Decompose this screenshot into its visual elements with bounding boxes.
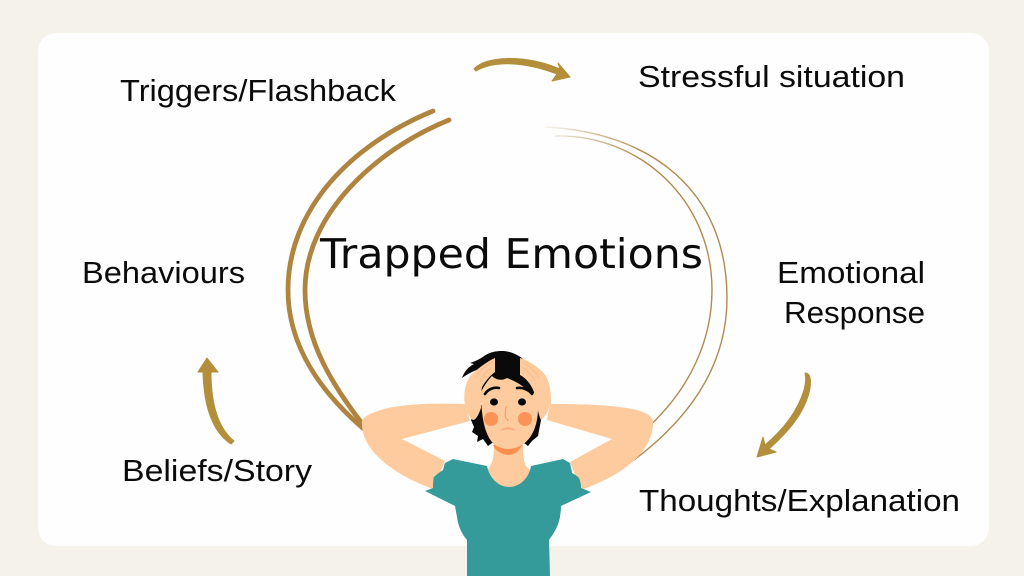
- cheeks: [484, 412, 532, 426]
- label: beliefs: Beliefs/Story: [122, 453, 313, 488]
- label: triggers: Triggers/Flashback: [120, 73, 397, 108]
- thick left arcs: [288, 111, 449, 441]
- left arm: [362, 404, 470, 489]
- left hand: [464, 358, 495, 420]
- thin right arcs: [545, 127, 727, 460]
- neck shadow: [493, 445, 522, 455]
- title: Trapped Emotions: [319, 230, 703, 278]
- hair back: [471, 405, 541, 446]
- arrow: to behaviours: [198, 358, 234, 444]
- label: behaviours: Behaviours: [82, 255, 245, 290]
- finger lines: [476, 362, 539, 382]
- neck: [485, 440, 535, 492]
- label: emotional response: Emotional: [777, 255, 925, 290]
- shirt: [425, 459, 591, 576]
- eyes: [490, 398, 526, 406]
- nose: [505, 406, 508, 421]
- arrow: to thoughts: [757, 373, 810, 457]
- hair top: [462, 351, 535, 395]
- figure: stressed woman: [362, 351, 653, 576]
- mouth: [500, 427, 516, 431]
- label: stressful situation: Stressful situation: [638, 59, 905, 94]
- face: [481, 374, 538, 449]
- arrow: to stressful situation: [474, 58, 570, 81]
- label: emotional response: [777, 255, 925, 330]
- label: thoughts: Thoughts/Explanation: [639, 483, 960, 518]
- right arm: [547, 404, 653, 490]
- label: emotional response: Response: [784, 295, 925, 330]
- right hand: [520, 358, 551, 420]
- eyebrows: [485, 388, 532, 394]
